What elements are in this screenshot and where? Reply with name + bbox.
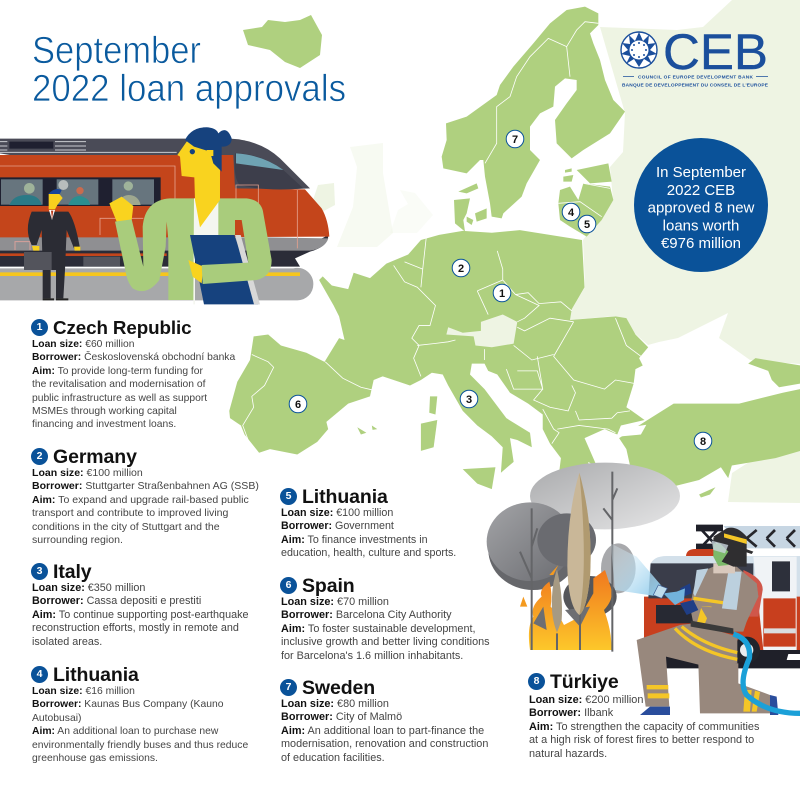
text block: Lithuania 4: environmentally friendly buses and thus reduce bbox=[32, 740, 248, 751]
text block: Italy: isolated areas. bbox=[32, 636, 102, 648]
title: September bbox=[32, 30, 201, 72]
logo: CEB: COUNCIL OF EUROPE DEVELOPMENT BANK bbox=[638, 74, 754, 80]
map markers: 1 bbox=[499, 288, 505, 300]
logo: CEB: CEB bbox=[663, 24, 768, 80]
text block: Lithuania 5: education, health, culture and sports. bbox=[281, 547, 456, 559]
text block: Lithuania 4: Autobusai) bbox=[32, 713, 81, 724]
text block: Lithuania 4: Aim: An additional loan to purchase new bbox=[32, 726, 218, 737]
icon: CEB sun emblem bbox=[621, 32, 657, 68]
text block: Spain: for Barcelona's 1.6 million inhabitants. bbox=[281, 650, 463, 662]
man with briefcase bbox=[24, 189, 80, 300]
woman with folder bbox=[109, 127, 272, 304]
text block: Spain: Borrower: Barcelona City Authority bbox=[281, 609, 452, 621]
text block: Italy bbox=[31, 561, 248, 648]
text block: Türkiye: Borrower: Ilbank bbox=[529, 707, 613, 719]
flames bbox=[520, 565, 612, 650]
fire engine bbox=[644, 526, 800, 668]
text block: Italy: 3 bbox=[37, 565, 42, 577]
map markers: 7 bbox=[512, 134, 518, 146]
text block: Lithuania 4: Borrower: Kaunas Bus Company (Kauno bbox=[32, 699, 223, 710]
text block: Italy: Borrower: Cassa depositi e prestiti bbox=[32, 595, 201, 607]
map markers: 3 bbox=[466, 394, 472, 406]
text block: Czech Republic: Loan size: €60 million bbox=[32, 339, 134, 350]
text block: Germany: Borrower: Stuttgarter Straßenbahnen AG (SSB) bbox=[32, 480, 259, 492]
text block: Sweden: Loan size: €80 million bbox=[281, 698, 389, 710]
text block: Germany: Loan size: €100 million bbox=[32, 467, 143, 479]
text block: Czech Republic: Aim: To provide long-term funding for bbox=[32, 366, 203, 377]
text block: Spain: inclusive growth and better living conditions bbox=[281, 636, 490, 648]
callout: total approved: loans worth bbox=[663, 218, 739, 234]
text block: Türkiye: Türkiye bbox=[550, 671, 619, 693]
text block: Italy: Loan size: €350 million bbox=[32, 582, 145, 594]
map: continental Europe and Türkiye bbox=[229, 230, 800, 497]
text block: Türkiye: natural hazards. bbox=[529, 748, 607, 760]
text block: Czech Republic: public infrastructure as well as support bbox=[32, 393, 207, 404]
text block: Sweden: Aim: An additional loan to part-finance the bbox=[281, 725, 484, 737]
text block: Spain: 6 bbox=[286, 579, 291, 591]
text block: Sweden: modernisation, renovation and construction bbox=[281, 738, 488, 750]
text block: Czech Republic: financing and investment loans. bbox=[32, 419, 176, 430]
text block: Italy: reconstruction efforts, mostly in remote and bbox=[32, 622, 239, 634]
text block: Lithuania 5 bbox=[280, 486, 456, 559]
text block: Sweden: Sweden bbox=[302, 677, 375, 699]
text block: Spain: Aim: To foster sustainable development, bbox=[281, 623, 476, 635]
text block: Germany: transport and contribute to improved living bbox=[32, 507, 228, 519]
text block: Sweden: of education facilities. bbox=[281, 752, 385, 764]
map: Iceland bbox=[243, 15, 322, 68]
callout: total approved: approved 8 new bbox=[648, 200, 755, 216]
text block: Germany: Germany bbox=[53, 446, 137, 468]
firefighter bbox=[637, 528, 800, 715]
trees bbox=[520, 472, 617, 652]
map markers: 5 bbox=[584, 219, 590, 231]
text block: Germany: Aim: To expand and upgrade rail-based public bbox=[32, 494, 249, 506]
text block: Lithuania 5: Lithuania bbox=[302, 486, 388, 508]
text block: Türkiye: Loan size: €200 million bbox=[529, 694, 643, 706]
text block: Lithuania 4 bbox=[31, 664, 248, 764]
map markers: 8 bbox=[700, 436, 706, 448]
text block: Germany: conditions in the city of Stuttgart and the bbox=[32, 521, 220, 533]
text block: Türkiye: Aim: To strengthen the capacity of communities bbox=[529, 721, 759, 733]
map: non-member countries in pale green bbox=[229, 0, 800, 503]
text block: Lithuania 4: Lithuania bbox=[53, 664, 139, 686]
text block: Sweden: Borrower: City of Malmö bbox=[281, 711, 402, 723]
map markers: 6 bbox=[295, 399, 301, 411]
text block: Spain bbox=[280, 575, 490, 662]
text block: Italy: Italy bbox=[53, 561, 92, 583]
water spray bbox=[611, 543, 662, 596]
text block: Germany bbox=[31, 446, 259, 546]
map: Scandinavia and Baltic states bbox=[442, 7, 625, 237]
logo: CEB: BANQUE DE DEVELOPPEMENT DU CONSEIL DE L'EUROPE bbox=[622, 82, 769, 88]
text block: Lithuania 5: 5 bbox=[286, 490, 291, 502]
text block: Spain: Spain bbox=[302, 575, 355, 597]
text block: Czech Republic bbox=[31, 317, 236, 430]
text block: Italy: Aim: To continue supporting post-earthquake bbox=[32, 609, 248, 621]
text block: Türkiye: 8 bbox=[534, 675, 539, 687]
callout: total approved: 2022 CEB bbox=[667, 182, 735, 199]
text block: Czech Republic: 1 bbox=[37, 321, 42, 333]
callout: total approved: €976 million bbox=[661, 235, 741, 252]
title: 2022 loan approvals bbox=[32, 68, 346, 110]
callout: total approved: In September bbox=[656, 164, 746, 181]
map markers: 4 bbox=[568, 207, 575, 219]
text block: Spain: Loan size: €70 million bbox=[281, 596, 389, 608]
smoke clouds bbox=[487, 463, 680, 617]
map markers: 2 bbox=[458, 263, 464, 275]
text block: Czech Republic: the revitalisation and modernisation of bbox=[32, 379, 205, 390]
text block: Czech Republic: Czech Republic bbox=[53, 317, 191, 338]
text block: Czech Republic: Borrower: Československá obchodní banka bbox=[32, 352, 235, 363]
text block: Türkiye: at a high risk of forest fires to better respond to bbox=[529, 734, 754, 746]
text block: Sweden: 7 bbox=[286, 681, 291, 693]
text block: Germany: surrounding region. bbox=[32, 534, 123, 546]
text block: Czech Republic: MSMEs through working capital bbox=[32, 406, 177, 417]
text block: Lithuania 5: Loan size: €100 million bbox=[281, 507, 393, 519]
text block: Germany: 2 bbox=[37, 450, 42, 462]
text block: Türkiye bbox=[528, 671, 760, 760]
text block: Lithuania 4: 4 bbox=[37, 668, 42, 680]
text block: Lithuania 4: greenhouse gas emissions. bbox=[32, 753, 158, 764]
text block: Lithuania 5: Borrower: Government bbox=[281, 520, 394, 532]
text block: Sweden bbox=[280, 677, 488, 764]
text block: Lithuania 4: Loan size: €16 million bbox=[32, 686, 135, 697]
text block: Lithuania 5: Aim: To finance investments in bbox=[281, 534, 428, 546]
